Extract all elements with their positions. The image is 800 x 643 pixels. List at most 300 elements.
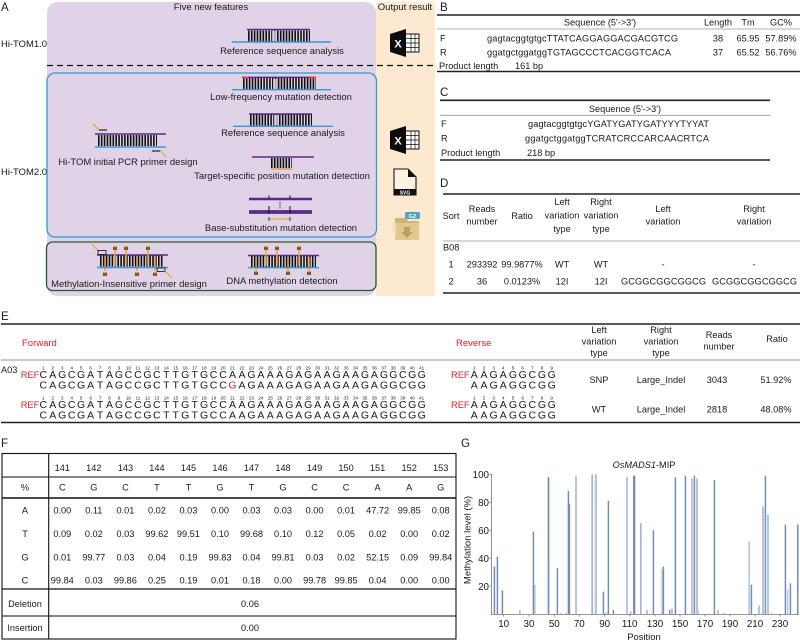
row 1: 1 [448, 260, 454, 270]
forward alignment 2: 19 [211, 396, 217, 400]
result row 2: Large_Indel [637, 404, 685, 414]
row T: 0.12 [306, 529, 324, 539]
row C: 0.03 [85, 576, 103, 586]
column headers: Right [650, 325, 672, 335]
row C: 99.86 [114, 576, 137, 586]
reference base row: G [437, 482, 444, 492]
forward alignment 2: 30 [315, 396, 321, 400]
forward alignment 1: 30 [315, 366, 321, 370]
column headers: variation [582, 336, 616, 346]
row A: 0.03 [243, 506, 260, 516]
forward alignment 1: 8 [108, 366, 111, 370]
row T: T [22, 529, 28, 539]
reverse alignment 1: 9 [550, 366, 553, 370]
row F: 65.95 [736, 34, 760, 44]
forward alignment 1: 36 [372, 366, 377, 370]
row G: 0.02 [337, 552, 355, 562]
x axis labels: 150 [672, 619, 689, 630]
forward alignment 2: 5 [80, 396, 83, 400]
row R: R [441, 134, 448, 144]
forward alignment 2: 38 [391, 396, 396, 400]
insertion row: Insertion [7, 623, 43, 633]
y axis labels: 100 [473, 470, 490, 481]
product length [441, 148, 555, 158]
row C: 0.04 [369, 576, 387, 586]
product length [439, 61, 543, 71]
reverse alignment 1: AAGAGGCGG [471, 380, 556, 392]
forward alignment 2: 16 [183, 396, 188, 400]
reverse alignment 2: 1 [473, 396, 476, 400]
position row: 146 [212, 463, 228, 473]
label Hi-TOM1.0: Hi-TOM1.0 [1, 39, 47, 50]
feature: methylation-insensitive primer design [51, 244, 207, 290]
product length: Product length [439, 61, 498, 71]
column headers: variation [584, 210, 618, 220]
forward alignment 1: 31 [325, 366, 330, 370]
result row 2: 2818 [707, 404, 727, 414]
row G: 0.03 [116, 552, 134, 562]
row C: 0.19 [179, 576, 197, 586]
row 2: 36 [477, 276, 487, 286]
forward alignment 2: 9 [118, 396, 121, 400]
column headers: Left [655, 204, 671, 214]
forward alignment 1: 38 [391, 366, 396, 370]
sample label A03: A03 [1, 365, 17, 375]
chart title: OsMADS1-MIP [613, 460, 675, 470]
row C: C [22, 576, 29, 586]
forward alignment 1: 25 [268, 366, 273, 370]
row T: 0.05 [337, 529, 355, 539]
blue Hi-TOM2.0 box [47, 73, 376, 237]
x axis labels: 30 [524, 619, 535, 630]
row A: 0.02 [148, 506, 166, 516]
feature: DNA methylation detection [226, 246, 338, 287]
forward alignment 2 [21, 396, 426, 422]
header row: Tm [741, 18, 755, 28]
position row: 143 [118, 463, 133, 473]
forward alignment 2: CAGCGATAGCCGCTTGTGCCAAGAAAGAGAAGAAGAGGCGG [40, 399, 426, 411]
reverse alignment 2: AAGAGGCGG [471, 399, 556, 411]
forward alignment 1: 10 [126, 366, 131, 370]
reference base row: C [343, 482, 350, 492]
y axis labels [473, 470, 490, 593]
x axis title: Position [627, 632, 661, 643]
reverse alignment 2: REF [451, 400, 470, 410]
forward alignment 1: 4 [70, 366, 73, 370]
column headers: type [553, 224, 571, 234]
forward alignment 2: 29 [306, 396, 311, 400]
icon: Excel file 1 [390, 29, 419, 57]
panel B: primer table [437, 2, 800, 72]
row 2: 2 [448, 276, 454, 286]
reverse alignment 1: 5 [512, 366, 515, 370]
column headers: number [703, 342, 735, 352]
position row: 144 [149, 463, 165, 473]
reference base row: C [122, 482, 129, 492]
forward alignment 1: 40 [410, 366, 415, 370]
position row: 141 [55, 463, 70, 473]
forward alignment 1: CAGCGATAGCCGCTTGTGCCGAGAAAGAGAAGAAGAGGCGG [40, 380, 426, 392]
column headers: type [592, 224, 610, 234]
reverse alignment 2: 9 [550, 396, 553, 400]
feature: DNA methylation detection: M [264, 246, 268, 252]
column headers: Reads [469, 204, 496, 214]
row R [441, 134, 710, 144]
row C: 0.00 [432, 576, 450, 586]
forward alignment 1: 3 [61, 366, 64, 370]
feature: DNA methylation detection: M [307, 271, 311, 277]
column headers: Reads [706, 330, 733, 340]
forward alignment 1: 5 [80, 366, 83, 370]
row F: F [441, 119, 447, 129]
row 1 [448, 260, 756, 270]
panel C: degenerate primer table [440, 87, 770, 160]
forward alignment 1: 20 [220, 366, 226, 370]
row C: 99.85 [335, 576, 358, 586]
column headers: Left [554, 197, 570, 207]
axes [490, 474, 799, 616]
position row: 152 [402, 463, 417, 473]
feature: Hi-TOM initial PCR primer design: Hi-TOM initial PCR primer design [58, 157, 198, 168]
forward alignment 1: 1 [42, 366, 45, 370]
forward alignment 1: 21 [230, 366, 235, 370]
feature: methylation-insensitive primer design: Methylation-Insensitive primer design [51, 279, 207, 290]
row R: ggatgctggatggTGTAGCCCTCACGGTCACA [487, 48, 672, 58]
forward alignment 1: 35 [362, 366, 368, 370]
panel F: base percentage table [1, 438, 456, 639]
panel A: Hi-TOM feature overview [1, 2, 435, 296]
row C: 0.00 [400, 576, 418, 586]
row 1: 293392 [467, 260, 497, 270]
forward alignment 2: 4 [70, 396, 73, 400]
forward alignment 2: 20 [220, 396, 226, 400]
column headers: Sort [443, 211, 460, 221]
reverse alignment 2: 5 [512, 396, 515, 400]
panel letter E: E [1, 311, 9, 323]
y axis labels: 40 [478, 554, 490, 565]
forward alignment 2: 11 [136, 396, 141, 400]
reference base row: G [279, 482, 287, 492]
result row 1 [590, 375, 792, 385]
forward alignment 2: 6 [89, 396, 92, 400]
column headers: type [590, 348, 608, 358]
row A: A [22, 506, 29, 516]
row T: 0.10 [274, 529, 292, 539]
forward alignment 2: 31 [325, 396, 330, 400]
forward alignment 1 [21, 366, 426, 392]
result row 1: 51.92% [760, 375, 792, 385]
row G: 52.15 [366, 552, 389, 562]
forward alignment 2: 1 [42, 396, 45, 400]
row A: 0.00 [306, 506, 324, 516]
feature: methylation-insensitive primer design: M [146, 246, 150, 252]
forward alignment 1: 12 [145, 366, 150, 370]
feature: methylation-insensitive primer design: M [135, 272, 139, 278]
row C: 99.84 [51, 576, 74, 586]
position row: 148 [275, 463, 291, 473]
row 1: WT [555, 260, 570, 270]
deletion row: Deletion [8, 599, 42, 609]
heading: five new features: Five new features [174, 2, 249, 13]
panel letter G: G [461, 438, 470, 450]
reverse alignment 1: AAGAGGCGG [471, 369, 556, 381]
forward alignment 2: 17 [192, 396, 198, 400]
forward alignment 2: 23 [249, 396, 254, 400]
row G: 0.03 [306, 552, 324, 562]
reverse alignment 1: 2 [483, 366, 486, 370]
forward alignment 2: 14 [164, 396, 169, 400]
reference base row: G [216, 482, 224, 492]
row C: 99.78 [303, 576, 326, 586]
column headers [22, 325, 788, 358]
reverse alignment 2: 3 [492, 396, 495, 400]
forward alignment 1: 33 [343, 366, 349, 370]
forward alignment 2: REF [21, 400, 40, 410]
row 1: - [661, 260, 665, 270]
reference base row: T [186, 482, 192, 492]
row C: 0.00 [274, 576, 292, 586]
x axis labels: 190 [722, 619, 739, 630]
forward alignment 2: 32 [334, 396, 340, 400]
row 1: - [752, 260, 756, 270]
reverse alignment 1: REF [451, 370, 470, 380]
forward alignment 1: 17 [192, 366, 198, 370]
panel letter B: B [440, 2, 448, 14]
row T: 99.62 [145, 529, 168, 539]
y axis labels: 80 [478, 498, 490, 509]
column headers: Right [743, 204, 765, 214]
reverse alignment 1: 4 [502, 366, 505, 370]
row A: 0.00 [53, 506, 71, 516]
reverse alignment 1: 7 [531, 366, 534, 370]
forward alignment 1: 41 [419, 366, 425, 370]
panel letter C: C [440, 87, 448, 99]
column headers: type [652, 348, 670, 358]
row T: 0.03 [116, 529, 134, 539]
row R: 65.52 [736, 48, 760, 58]
x axis labels: 70 [574, 619, 585, 630]
row G: 0.09 [400, 552, 418, 562]
column headers: Left [591, 325, 607, 335]
column headers: Ratio [766, 334, 788, 344]
forward alignment 2: 26 [277, 396, 283, 400]
row R: 37 [713, 48, 723, 58]
product length: 161 bp [515, 61, 543, 71]
feature: Hi-TOM initial PCR primer design [58, 124, 198, 168]
feature: reference sequence analysis 1.0: Reference sequence analysis [220, 46, 344, 57]
column headers: Forward [22, 338, 57, 349]
row G: 0.04 [243, 552, 260, 562]
icon: Excel file 1: X [394, 38, 402, 50]
panel D: variation table [440, 178, 800, 293]
result row 1: 3043 [707, 375, 727, 385]
row T: 0.02 [85, 529, 103, 539]
y axis labels: 20 [478, 582, 490, 593]
reverse alignment 1 [451, 366, 556, 392]
row G: 99.84 [429, 552, 452, 562]
forward alignment 2: 34 [353, 396, 358, 400]
result row 1: Large_Indel [637, 375, 685, 385]
feature: DNA methylation detection: M [286, 271, 290, 277]
row T: 0.10 [211, 529, 229, 539]
forward alignment 2: 8 [108, 396, 111, 400]
forward alignment 2: CAGCGATAGCCGCTTGTGCCAAGAAAGAGAAGAAGAGGCGG [40, 410, 426, 422]
row C: 0.18 [243, 576, 260, 586]
reverse alignment 2: 7 [531, 396, 534, 400]
row A: 99.85 [398, 506, 421, 516]
reference base row: G [90, 482, 97, 492]
reference base row: A [406, 482, 413, 492]
icon: Excel file 2 [390, 126, 419, 154]
feature: DNA methylation detection: DNA methylation detection [226, 276, 338, 287]
forward alignment 1: 28 [296, 366, 302, 370]
row 2 [448, 276, 797, 286]
row A: 0.00 [211, 506, 229, 516]
row G: G [21, 552, 29, 562]
row R [440, 48, 797, 58]
position row: 153 [433, 463, 448, 473]
row T: 99.51 [177, 529, 200, 539]
header row: GC% [770, 18, 792, 28]
forward alignment 2: 25 [268, 396, 273, 400]
deletion row: 0.06 [241, 599, 259, 609]
feature: low-frequency mutation detection: Low-frequency mutation detection [210, 92, 352, 103]
forward alignment 1: 14 [164, 366, 169, 370]
forward alignment 1: 34 [353, 366, 358, 370]
column headers: variation [646, 216, 680, 226]
forward alignment 2: 21 [230, 396, 235, 400]
icon: SVG file: SVG [400, 190, 410, 196]
forward alignment 2: 33 [343, 396, 349, 400]
column headers: Right [590, 197, 612, 207]
panel G: methylation bar chart [461, 438, 799, 643]
position row: 147 [244, 463, 259, 473]
position row: 149 [307, 463, 322, 473]
forward alignment 1: 39 [400, 366, 406, 370]
forward alignment 1: 26 [277, 366, 283, 370]
forward alignment 2: 37 [381, 396, 387, 400]
reverse alignment 1: 6 [521, 366, 524, 370]
product length: 218 bp [527, 148, 555, 158]
icon: SVG file [394, 169, 416, 196]
row R: R [440, 48, 447, 58]
y axis labels: 60 [478, 526, 490, 537]
forward alignment 2: 3 [61, 396, 64, 400]
reference base row: C [59, 482, 66, 492]
row G: 0.01 [53, 552, 71, 562]
position row: 150 [338, 463, 354, 473]
feature: DNA methylation detection: M [275, 246, 279, 252]
row F: gagtacggtgtgcTTATCAGGAGGACGACGTCG [487, 34, 678, 44]
forward alignment 2: 22 [239, 396, 245, 400]
row F: gagtacggtgtgcYGATYGATYGATYYYTYYAT [528, 119, 709, 129]
header row: Sequence (5'->3') [564, 18, 636, 28]
forward alignment 1: 9 [118, 366, 121, 370]
forward alignment 2: 13 [154, 396, 160, 400]
panel letter A: A [1, 2, 9, 14]
forward alignment 2: 2 [52, 396, 55, 400]
forward alignment 2: 15 [173, 396, 179, 400]
panel letter D: D [440, 178, 448, 190]
feature: methylation-insensitive primer design: M [113, 246, 117, 252]
feature: reference sequence analysis 2.0: Reference sequence analysis [221, 128, 345, 139]
row 2: 12I [595, 276, 607, 286]
row 1: 99.9877% [501, 260, 543, 270]
icon: GZ archive [392, 212, 420, 240]
feature: reference sequence analysis 1.0 [220, 30, 344, 57]
row G: 99.81 [272, 552, 294, 562]
header row [564, 18, 792, 28]
x axis labels: 130 [647, 619, 664, 630]
row G: 0.04 [148, 552, 166, 562]
reverse alignment 1: 8 [541, 366, 544, 370]
row R: ggatgctggatggTCRATCRCCARCAACRTCA [525, 134, 710, 144]
forward alignment 1: REF [21, 370, 40, 380]
forward alignment 1: 11 [136, 366, 141, 370]
feature: methylation-insensitive primer design: M [103, 272, 107, 278]
reference base row: T [154, 482, 160, 492]
column headers [443, 197, 771, 234]
row A: 47.72 [366, 506, 389, 516]
feature: low-frequency mutation detection [210, 77, 352, 103]
row A: 0.03 [274, 506, 292, 516]
forward alignment 1: 29 [306, 366, 311, 370]
forward alignment 2: 40 [410, 396, 415, 400]
forward alignment 1: CAGCGATAGCCGCTTGTGCCAAGAAAGAGAAGAAGAGGCGG [40, 369, 426, 381]
row T: 0.00 [400, 529, 418, 539]
reverse alignment 2: 4 [502, 396, 505, 400]
x axis labels: 170 [697, 619, 714, 630]
row F: 57.89% [765, 34, 797, 44]
forward alignment 2: 28 [296, 396, 302, 400]
row F [441, 119, 709, 129]
forward alignment 1: 18 [202, 366, 207, 370]
forward alignment 1: 32 [334, 366, 340, 370]
row G: 0.19 [179, 552, 197, 562]
row R: 56.76% [765, 48, 797, 58]
orange output column [376, 2, 435, 296]
row G: 99.77 [82, 552, 105, 562]
panel letter F: F [1, 438, 8, 450]
forward alignment 1: 13 [154, 366, 160, 370]
feature: methylation-insensitive primer design: M [124, 246, 128, 252]
row A: 0.11 [85, 506, 102, 516]
reverse alignment 1: 3 [492, 366, 495, 370]
feature: DNA methylation detection: M [254, 271, 258, 277]
row T: 0.02 [369, 529, 387, 539]
x axis labels: 90 [599, 619, 611, 630]
row C: 0.01 [211, 576, 229, 586]
icon: GZ archive: GZ [409, 214, 417, 220]
forward alignment 1: 24 [258, 366, 264, 370]
feature: target-specific position mutation detection: Target-specific position mutation detection [194, 171, 370, 182]
x axis labels: 210 [747, 619, 764, 630]
forward alignment 1: 16 [183, 366, 188, 370]
feature: base-substitution mutation detection [205, 196, 357, 234]
row T: 99.68 [240, 529, 263, 539]
position row: 145 [181, 463, 196, 473]
insertion row: 0.00 [241, 623, 259, 633]
column headers: number [466, 216, 498, 226]
forward alignment 2: 12 [145, 396, 150, 400]
forward alignment 1: 2 [52, 366, 55, 370]
position row: 142 [86, 463, 101, 473]
feature: methylation-insensitive primer design: M [153, 272, 157, 278]
feature: reference sequence analysis 2.0 [221, 114, 345, 139]
reference base row: T [249, 482, 255, 492]
forward alignment 2: 10 [126, 396, 131, 400]
column headers: variation [737, 216, 771, 226]
